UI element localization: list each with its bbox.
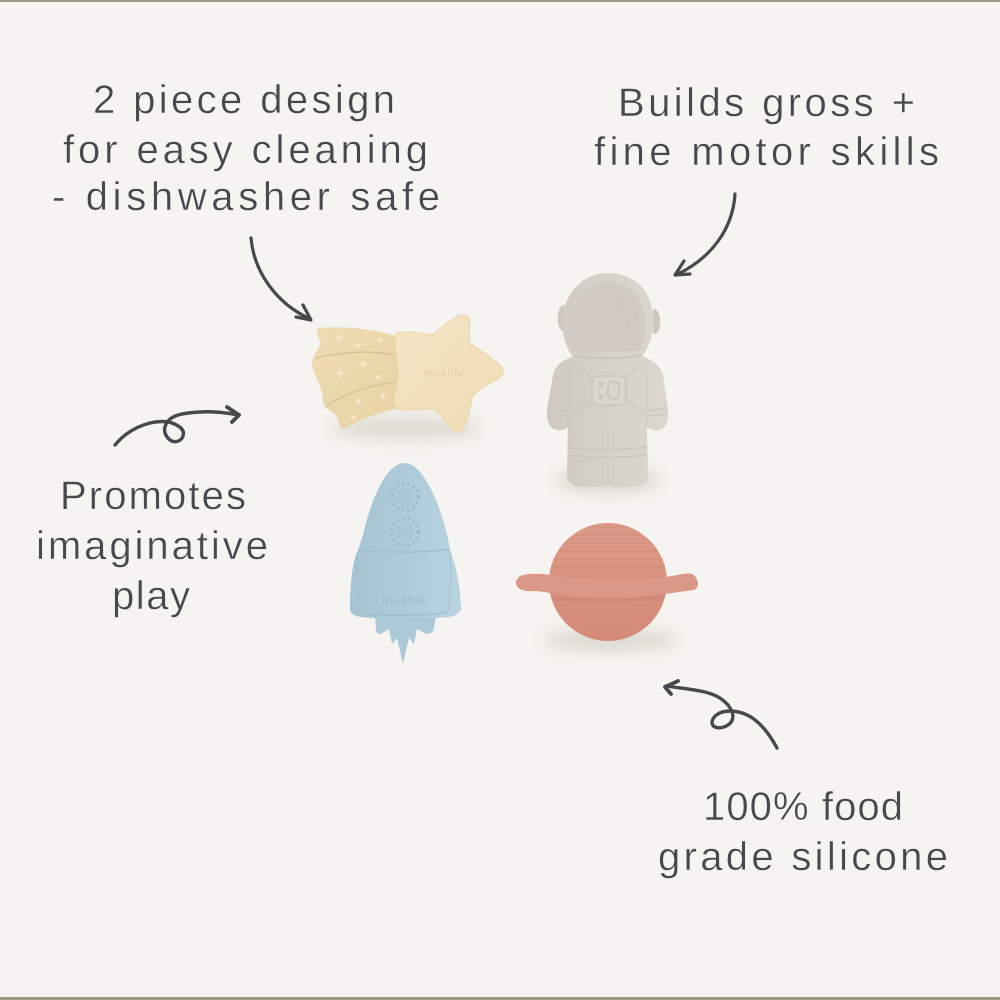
shadow bbox=[556, 467, 660, 493]
text: 2 piece design callout: 2 piece design bbox=[93, 78, 395, 122]
text: motor skills callout bbox=[594, 81, 939, 174]
text: 2 piece design callout: for easy cleaning bbox=[63, 128, 428, 172]
star trail bbox=[312, 327, 400, 430]
toy: astronaut bbox=[547, 273, 668, 493]
text: imaginative play callout: imaginative bbox=[36, 524, 268, 568]
toy: rocket bbox=[350, 463, 461, 664]
planet sphere bbox=[549, 523, 667, 641]
toy: shooting star bbox=[312, 315, 503, 439]
shadow bbox=[542, 629, 678, 651]
text: 2 piece design callout bbox=[52, 78, 440, 219]
arrow: looped to planet bbox=[665, 681, 777, 748]
flame bbox=[375, 616, 436, 664]
visor bbox=[571, 282, 645, 352]
chest pack bbox=[592, 376, 626, 405]
rocket logo: mushie bbox=[382, 593, 426, 608]
planet ring bbox=[516, 573, 698, 598]
body seams bbox=[357, 549, 450, 615]
text: 2 piece design callout: - dishwasher safe bbox=[52, 175, 440, 219]
text: imaginative play callout: Promotes bbox=[60, 474, 246, 518]
trail sparkles bbox=[335, 334, 386, 420]
text: imaginative play callout bbox=[36, 474, 268, 618]
text: silicone callout: 100% food bbox=[703, 785, 903, 829]
rocket silhouette bbox=[350, 463, 461, 618]
ring shadow bbox=[555, 596, 662, 601]
star logo: mushie bbox=[424, 368, 464, 379]
text: motor skills callout: Builds gross + bbox=[618, 81, 915, 125]
ear knobs bbox=[560, 307, 658, 332]
astronaut silhouette bbox=[547, 273, 668, 487]
porthole top bbox=[392, 484, 418, 510]
text: silicone callout bbox=[658, 785, 948, 879]
arrow: to astronaut bbox=[675, 194, 735, 275]
shadow bbox=[330, 417, 480, 439]
arrow: to shooting star bbox=[251, 238, 311, 320]
toy: planet bbox=[516, 523, 698, 651]
porthole bottom bbox=[392, 518, 418, 546]
top border bbox=[0, 0, 1000, 2]
text: imaginative play callout: play bbox=[112, 574, 190, 618]
planet ribs bbox=[551, 527, 665, 629]
arrow: looped to star from left bbox=[115, 407, 239, 445]
star body bbox=[393, 315, 503, 432]
bottom border bbox=[0, 997, 1000, 1000]
text: motor skills callout: fine motor skills bbox=[594, 130, 939, 174]
chest buttons bbox=[598, 382, 619, 400]
text: silicone callout: grade silicone bbox=[658, 835, 948, 879]
straps and suit lines bbox=[548, 297, 667, 484]
